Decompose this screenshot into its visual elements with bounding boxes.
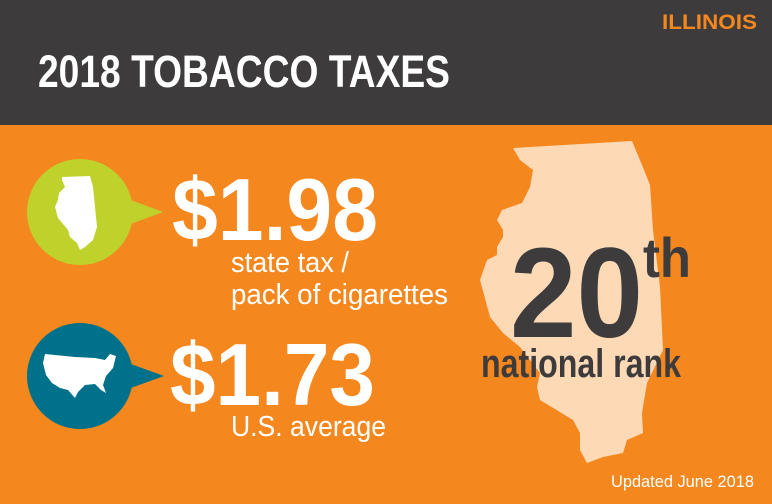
US average figure: $1.73 <box>170 325 375 424</box>
update note: Updated June 2018 <box>611 472 754 491</box>
state tax figure <box>172 160 448 311</box>
icon: US speech bubble <box>27 323 164 429</box>
rank label: national rank <box>481 342 682 386</box>
title: 2018 TOBACCO TAXES <box>38 46 450 97</box>
US average figure: U.S. average <box>231 411 386 443</box>
state tax figure: $1.98 <box>172 160 378 259</box>
state label: ILLINOIS <box>662 11 757 34</box>
icon: Illinois speech bubble <box>27 159 163 265</box>
state tax figure: state tax / <box>231 247 350 279</box>
state tax figure: pack of cigarettes <box>231 279 448 311</box>
large Illinois map <box>480 141 663 463</box>
orange panel <box>0 125 772 504</box>
rank number: 20 <box>510 222 643 365</box>
header bar <box>0 0 772 125</box>
rank number: th <box>643 226 691 289</box>
